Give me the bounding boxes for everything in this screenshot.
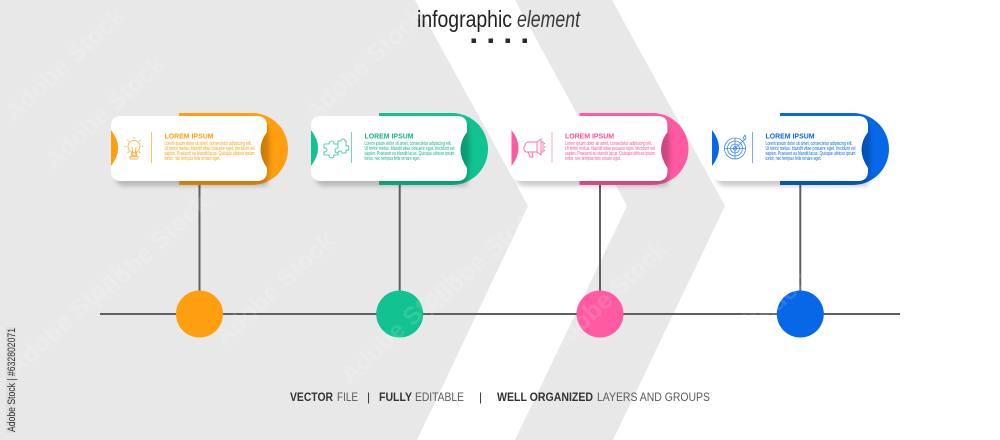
footer caption — [290, 390, 710, 404]
watermark pattern: Adobe Stock — [542, 235, 673, 359]
title: element — [517, 6, 581, 32]
footer caption: | — [479, 390, 482, 404]
card 1 text: Lorem ipsum dolor sit amet, consectetur adipiscing elit. — [164, 141, 252, 147]
stem 3 — [599, 180, 601, 295]
card 3 text: LOREM IPSUM — [565, 132, 614, 140]
card 4 colored backing — [780, 113, 889, 185]
card 3 text — [565, 132, 655, 162]
timeline dot 4 — [777, 290, 824, 338]
timeline dot 1 — [176, 290, 223, 338]
card 4 text: tortor, nec tempus felis ornare eget. — [766, 156, 822, 162]
card 4 text: sapien. Praesent eu blandit lacus. Quisque ultrices ipsum — [766, 151, 856, 157]
card 2 colored backing — [379, 113, 488, 185]
card 1 left accent — [111, 130, 118, 166]
watermark pattern: Adobe Stock — [335, 265, 466, 389]
card 1 text: tortor, nec tempus felis ornare eget. — [164, 156, 220, 162]
card 3 text: Ut tortor metus, blandit vitae posuere eget, tincidunt vel — [565, 146, 655, 152]
card 3 left accent — [512, 130, 518, 166]
watermark pattern: Adobe Stock — [749, 205, 880, 329]
card 4 text — [766, 132, 856, 162]
card 1 text — [164, 132, 254, 162]
footer caption: LAYERS AND GROUPS — [597, 390, 710, 404]
card 2 text: Ut tortor metus, blandit vitae posuere eget, tincidunt vel — [364, 146, 454, 152]
card 1 text: sapien. Praesent eu blandit lacus. Quisque ultrices ipsum — [164, 151, 254, 157]
footer caption: WELL ORGANIZED — [497, 390, 593, 404]
icon: puzzle pieces — [324, 139, 349, 158]
card 2 text: Lorem ipsum dolor sit amet, consectetur adipiscing elit. — [364, 141, 452, 147]
watermark pattern — [0, 2, 880, 396]
card 1 text: Ut tortor metus, blandit vitae posuere eget, tincidunt vel — [164, 146, 254, 152]
stem 4 — [799, 180, 801, 295]
card 2 shadow — [316, 124, 470, 186]
card 4 white body — [712, 116, 868, 181]
card 4 text: Ut tortor metus, blandit vitae posuere eget, tincidunt vel — [766, 146, 856, 152]
card 4 left accent — [712, 130, 719, 166]
card 4 text: Lorem ipsum dolor sit amet, consectetur adipiscing elit. — [766, 141, 852, 147]
card 3 colored backing — [580, 113, 688, 185]
card 2 text: LOREM IPSUM — [364, 132, 414, 140]
icon: light bulb — [124, 137, 144, 159]
card 3 shadow — [516, 124, 670, 186]
footer caption: VECTOR — [290, 390, 333, 404]
divider 2 — [350, 132, 352, 163]
footer caption: FILE — [337, 390, 358, 404]
step 4: blue — [712, 113, 889, 338]
divider 1 — [150, 132, 152, 163]
timeline axis — [100, 313, 900, 315]
card 2 text — [364, 132, 454, 162]
timeline dot 2 — [376, 290, 423, 338]
card 2 text: sapien. Praesent eu blandit lacus. Quisque ultrices ipsum — [364, 151, 454, 157]
watermark pattern: Adobe Stock — [0, 2, 130, 126]
card 3 white body — [512, 116, 668, 181]
title: infographic — [417, 6, 512, 32]
watermark pattern: Adobe Stock — [209, 227, 340, 351]
card 1 text: LOREM IPSUM — [164, 132, 214, 140]
watermark pattern: Adobe Stock — [2, 257, 133, 381]
stem 1 — [198, 180, 200, 295]
title — [417, 6, 581, 32]
card 3 text: Lorem ipsum dolor sit amet, consectetur adipiscing elit. — [565, 141, 652, 147]
card 3 text: tortor, nec tempus felis ornare eget. — [565, 156, 621, 162]
card 2 left accent — [311, 130, 318, 166]
icon: target — [724, 135, 746, 159]
icon: megaphone — [524, 139, 546, 157]
card 2 white body — [311, 116, 467, 181]
divider 4 — [752, 132, 754, 163]
title dots — [472, 38, 527, 43]
divider 3 — [551, 132, 553, 163]
stem 2 — [399, 180, 401, 295]
step 3: pink — [512, 113, 688, 338]
step 2: green — [311, 113, 488, 338]
card 4 shadow — [717, 124, 870, 186]
watermark pattern: Adobe Stock — [39, 50, 170, 174]
step 1: orange — [111, 113, 288, 338]
watermark pattern: Adobe Stock — [83, 189, 214, 313]
footer caption: FULLY — [379, 390, 412, 404]
card 1 shadow — [116, 124, 270, 186]
footer caption: | — [367, 390, 370, 404]
stock id label: Adobe Stock | #632802071 — [6, 328, 18, 432]
watermark pattern: Adobe Stock — [299, 2, 430, 126]
footer caption: EDITABLE — [415, 390, 464, 404]
card 2 text: tortor, nec tempus felis ornare eget. — [364, 156, 420, 162]
timeline dot 3 — [576, 290, 624, 338]
watermark pattern: Adobe Stock — [416, 197, 547, 321]
card 4 text: LOREM IPSUM — [766, 132, 814, 140]
watermark pattern: Adobe Stock — [668, 272, 799, 396]
card 3 text: sapien. Praesent eu blandit lacus. Quisque ultrices ipsum — [565, 151, 655, 157]
card 1 colored backing — [179, 113, 288, 185]
card 1 white body — [111, 116, 267, 181]
